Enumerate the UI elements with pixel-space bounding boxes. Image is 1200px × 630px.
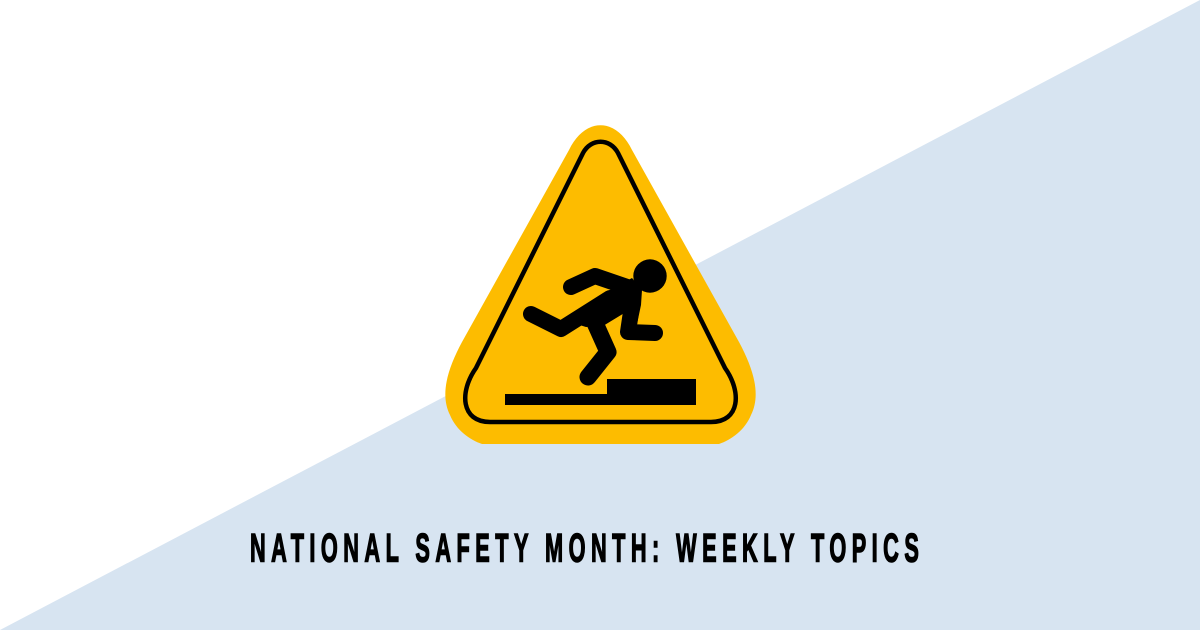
sign: yellow rounded triangle (445, 125, 756, 444)
sign: black inner border (465, 142, 736, 422)
icon: trip hazard warning sign (445, 125, 756, 444)
title: NATIONAL SAFETY MONTH: WEEKLY TOPICS (250, 526, 919, 570)
icon: falling person (531, 259, 667, 377)
icon: raised floor step (505, 379, 696, 405)
